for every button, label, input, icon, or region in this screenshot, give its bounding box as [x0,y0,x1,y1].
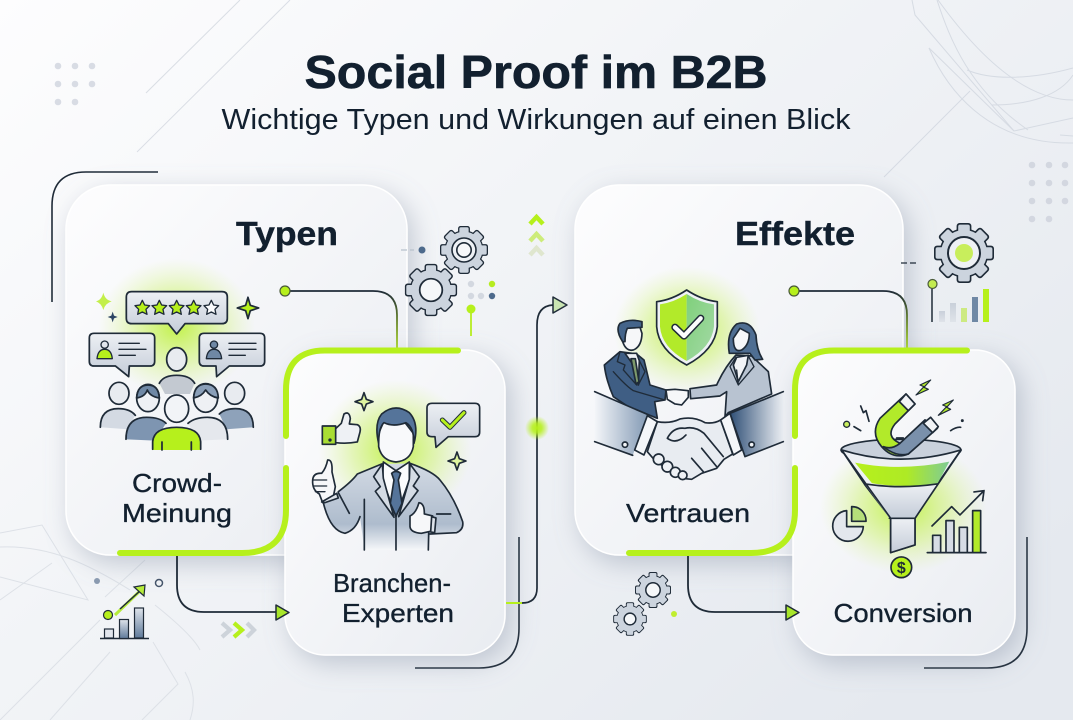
icon: funnel with magnet [820,380,987,578]
label: Conversion: Conversion [834,598,972,628]
dashed line and dot [401,246,426,254]
dollar coin: $ [897,560,906,577]
icon: gears lower [613,572,677,636]
big handshake [635,413,742,480]
heading: Effekte: Effekte [735,215,855,252]
connector: Effekte to Conversion top [789,286,907,348]
sleeve left [595,392,648,455]
businessman [313,408,463,550]
bar chart with arrow [927,491,986,553]
icon: sparkles [96,293,259,322]
businessman left [604,320,666,418]
subtitle: Wichtige Typen und Wirkungen auf einen Blick [222,104,851,136]
accent: lime frame Effekte [629,350,967,553]
label: Crowd-Meinung [122,468,232,528]
icon: chevrons right [222,623,254,637]
dollar coin [891,557,912,578]
icon: gear bottom [405,264,457,316]
dots [468,281,495,299]
panel: Conversion [793,350,1015,655]
gears cluster: centre [401,226,495,336]
small handshake [666,389,688,405]
funnel body [842,450,961,553]
funnel rim [841,439,961,461]
speech bubble with check [427,403,480,447]
arrowhead: into Branchen-Experten [276,605,289,620]
decorative dots: top left [55,63,95,105]
sleeve right [730,392,783,457]
connector: Vertrauen to Conversion [688,556,787,612]
icon: chevrons up [530,217,543,255]
decorative dots: top right [1029,162,1068,222]
speech bubble with stars [126,292,227,334]
icon: shield [657,290,717,365]
arrowhead: into Conversion [786,605,799,620]
title: Social Proof im B2B [304,46,768,98]
icon: gear right with bar chart [901,223,994,322]
icon: gear top [440,226,488,274]
connector: Crowd-Meinung to Branchen-Experten [177,556,278,612]
icon: handshake and shield [595,267,783,480]
decorative line art: bottom left [0,525,200,720]
small sparks [844,406,963,431]
label: Crowd-Meinung: Crowd- [132,468,222,498]
panel: Branchen-Experten [285,350,505,655]
label: Branchen-Experten [333,568,454,628]
panel: Effekte [575,185,903,555]
connector: Branchen-Experten to Vertrauen [506,297,567,603]
decorative line art: top right [884,0,1073,177]
icon: growth bar chart [94,578,162,638]
icon: small thumbs up [322,413,360,444]
speech bubble left [89,333,155,377]
bracket line: right of Branchen-Experten [415,537,519,668]
label: Branchen-Experten: Branchen- [333,568,451,598]
heading: Typen: Typen [236,215,338,252]
icon: expert with thumbs up [313,380,480,550]
crowd figures [100,348,253,450]
lime pin [466,304,476,336]
businesswoman right [690,323,772,417]
label: Branchen-Experten: Experten [342,598,454,628]
bracket line: right of Conversion [924,537,1027,668]
icon: sparkle top [355,393,373,411]
speech bubble right [199,333,265,377]
lightning bolts [916,380,953,415]
decorative line art: top left [137,0,290,152]
icon: crowd with ratings [89,258,265,450]
bracket line: top left [52,172,158,302]
label: Crowd-Meinung: Meinung [122,498,232,528]
accent: lime frame Typen [120,350,458,553]
pie chart [833,507,866,541]
magnet [875,394,938,456]
label: Vertrauen: Vertrauen [626,498,750,528]
icon: sparkle bottom [448,452,466,470]
panel: Typen [66,185,407,555]
connector: Typen to Branchen-Experten top [280,286,397,348]
